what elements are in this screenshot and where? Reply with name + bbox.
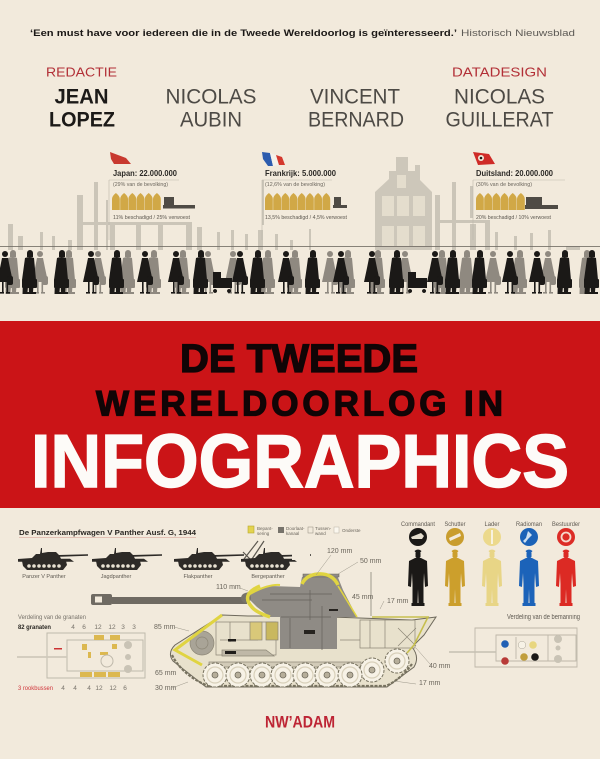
mini tanks [18,541,311,580]
red title band [0,321,600,508]
crew: Lader: Lader [484,521,500,528]
text: Japan population: Japan: 22.000.000 [113,168,177,178]
text: France share: (12,6% van de bevolking) [265,182,325,188]
tank gun barrel [91,594,247,605]
author: Nicolas Aubin: NICOLAS [166,86,256,108]
cutaway tank [91,548,451,692]
crew: Bestuurder: Bestuurder [552,521,581,528]
tank: Jagdpanther: Jagdpanther [101,574,131,580]
author: Vincent Bernard: BERNARD [308,108,404,132]
crew: Radioman [516,521,542,606]
crew: Bestuurder [552,521,581,606]
text: Germany damage: 20% beschadigd / 10% verwoest [476,215,551,221]
crew: Schutter [444,521,466,606]
title: De Tweede Wereldoorlog: DE TWEEDE [180,337,418,381]
numbers: bottom ammo row: 4 [87,685,91,692]
icons: Japan bullets [112,193,161,210]
plan view: tank with crew [449,628,577,667]
label: redactie: REDACTIE [46,66,117,80]
legend: Bepant- [257,526,273,531]
legend: kanaal [286,531,299,536]
icon: France casualties [333,197,347,208]
panel heading: Panther: De Panzerkampfwagen V Panther Ausf. G, 1944 [19,528,197,537]
crew layout plan [449,614,580,667]
author: Jean Lopez: LOPEZ [49,108,115,132]
text: ammo distribution: Verdeling van de granaten [18,614,86,621]
author: Vincent Bernard: VINCENT [310,86,400,108]
legend: Tussen- [315,526,332,531]
numbers: top ammo row: 6 [82,624,86,631]
icon: Japan casualties [163,197,195,208]
icons: Germany bullets [476,193,525,210]
quote line: ‘Een must have voor iedereen die in de Tweede Wereldoorlog is geïnteresseerd.’ [30,28,457,38]
author: Nicolas Aubin: AUBIN [180,108,242,132]
author: Nicolas Guillerat [446,86,554,132]
numbers: top ammo row: 4 [71,624,75,631]
thickness labels: 40 mm [429,663,451,670]
text: France damage: 13,5% beschadigd / 4,5% verwoest [265,215,347,221]
tank: Panzer V Panther [18,548,88,580]
tank: Flakpanther [174,548,244,580]
ruined city skyline [8,157,580,250]
tank: Bergepanther [241,541,311,580]
author: Nicolas Guillerat: NICOLAS [454,86,545,108]
crew: Commandant: Commandant [401,521,435,528]
numbers: bottom ammo row: 4 [61,685,65,692]
tank: Jagdpanther [92,548,162,580]
legend: wand [315,531,326,536]
walking refugees: background figures [5,250,594,294]
icon: German flag [473,152,495,165]
text: France population: Frankrijk: 5.000.000 [265,168,336,178]
ammo layout plan: 82 granaten [18,624,51,631]
numbers: bottom ammo row: 4 [73,685,77,692]
author: Nicolas Aubin [166,86,256,132]
plan view: tank with ammo [17,633,145,678]
numbers: top ammo row: 3 [121,624,125,631]
title: De Tweede Wereldoorlog [96,337,503,424]
numbers: bottom ammo row: 6 [123,685,127,692]
thickness labels [154,548,451,692]
legend: Doorlaat- [286,526,305,531]
statistic: Germany [473,152,565,240]
hull interior [190,620,416,667]
numbers: top ammo row [71,624,136,631]
thickness labels: 50 mm [360,558,382,565]
ground line [0,245,600,248]
ammo layout plan [17,614,145,692]
text: smoke launchers: 3 rookbussen [18,685,53,692]
tank: Flakpanther: Flakpanther [183,574,213,580]
title: Infographics: INFOGRAPHICS [31,419,569,503]
icon: Germany casualties [525,197,558,209]
title: De Tweede Wereldoorlog: WERELDOORLOG IN [96,384,503,424]
building: stepped gable house [375,157,432,250]
authors [46,66,554,132]
author: Jean Lopez: JEAN [54,86,108,108]
text: Germany share: (30% van de bevolking) [476,182,532,188]
thickness labels: 85 mm [154,624,176,631]
numbers: bottom ammo row: 12 [95,685,103,692]
crew: Radioman: Radioman [516,521,542,528]
statistic: France [262,152,347,240]
quote line: Historisch Nieuwsblad [461,28,575,38]
numbers: top ammo row: 12 [94,624,102,631]
author: Vincent Bernard [308,86,404,132]
text: Japan share: (29% van de bevolking) [113,182,168,188]
tank: Panzer V Panther: Panzer V Panther [22,574,66,580]
numbers: bottom ammo row: 12 [109,685,117,692]
quote line [30,28,575,38]
numbers: top ammo row: 12 [108,624,116,631]
thickness labels: 17 mm [419,680,441,687]
tank hull [170,615,436,687]
author: Jean Lopez [49,86,115,132]
thickness labels: 30 mm [155,685,177,692]
thickness labels: 120 mm [327,548,352,555]
legend: Onderste [342,528,361,533]
tank track and wheels [172,649,412,687]
crew: Lader [482,521,502,606]
legend: sering [257,531,270,536]
publisher logo: NW’ADAM [265,712,335,732]
crew figures [401,521,581,606]
crew: Commandant [401,521,435,606]
text: Germany population: Duitsland: 20.000.000 [476,168,553,178]
author: Nicolas Guillerat: GUILLERAT [446,108,554,132]
thickness labels: 65 mm [155,670,177,677]
icons: France bullets [265,193,330,210]
legend [248,526,361,536]
icon: Japanese flag [110,152,131,164]
antenna [370,572,372,616]
tank: Bergepanther: Bergepanther [251,574,285,580]
numbers: bottom ammo row [61,685,127,692]
walking refugees: foreground figures [0,250,599,294]
thickness labels: 110 mm [216,584,241,591]
yellow armour plates [175,574,428,665]
icon: French flag [262,152,285,166]
thickness labels: 17 mm [387,598,409,605]
icon: baby carriage [213,272,232,293]
thickness labels: 45 mm [352,594,374,601]
text: crew distribution: Verdeling van de bemanning [507,614,580,621]
numbers: top ammo row: 3 [132,624,136,631]
text: Japan damage: 11% beschadigd / 25% verwoest [113,215,190,221]
statistic: Japan [109,152,195,240]
tank turret [241,574,357,650]
crew: Schutter: Schutter [444,521,466,528]
label: datadesign: DATADESIGN [452,66,547,80]
